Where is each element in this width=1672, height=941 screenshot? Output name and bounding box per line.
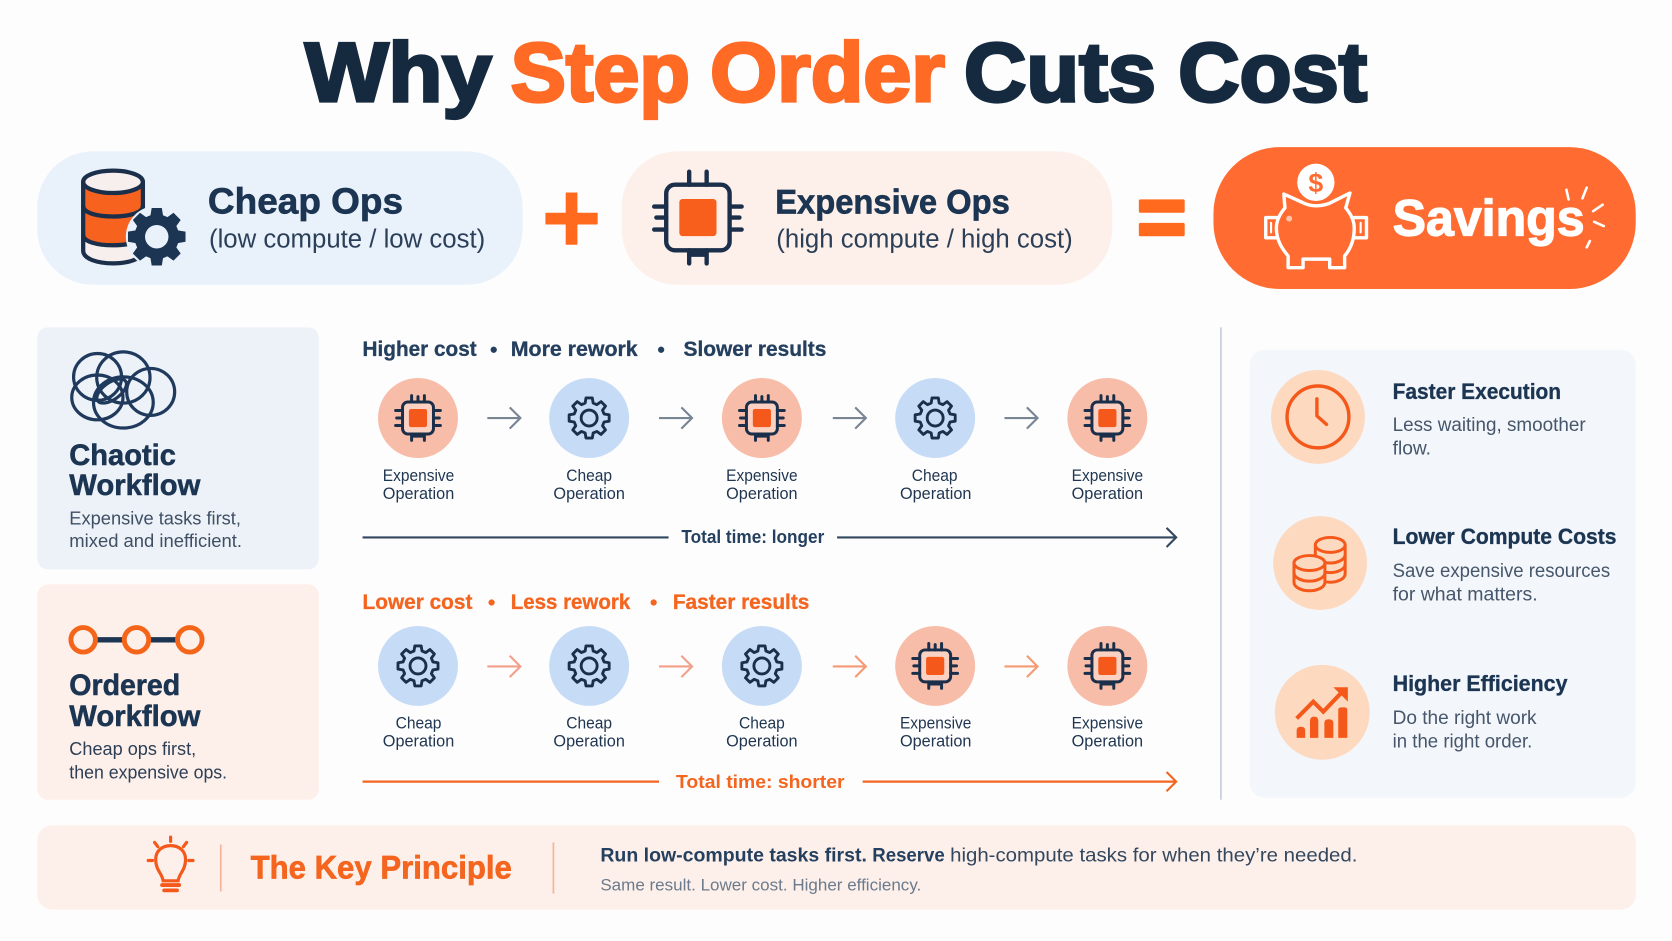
icon: large chip	[654, 172, 742, 263]
icon: coin: $	[1308, 168, 1323, 198]
ordered description: then expensive ops.	[69, 761, 227, 782]
step 4: cheap: Operation	[900, 484, 971, 503]
step 1: expensive	[378, 378, 458, 503]
chaotic heading: Workflow	[69, 469, 201, 502]
chaotic heading	[69, 439, 201, 502]
chaotic outcomes: Slower results	[684, 337, 826, 361]
cheap ops heading: Cheap Ops	[208, 180, 403, 221]
benefit: higher efficiency: in the right order.	[1393, 731, 1532, 752]
icon: rising chart	[1297, 687, 1348, 738]
step 5: expensive: Expensive	[1072, 466, 1143, 485]
ordered flow row	[363, 590, 1176, 792]
arrow	[487, 656, 520, 677]
step 1: cheap: Operation	[383, 731, 454, 750]
title: Why	[305, 26, 492, 119]
key principle statement: Run low-compute tasks first.	[600, 845, 867, 867]
chaotic description: mixed and inefficient.	[69, 530, 242, 551]
ordered outcomes: Faster results	[673, 590, 809, 614]
panel: chaotic workflow	[37, 327, 319, 569]
savings label: Savings	[1393, 190, 1585, 247]
panel: savings	[1213, 147, 1636, 289]
benefit: faster execution	[1271, 370, 1586, 464]
key principle note: Same result. Lower cost. Higher efficiency.	[600, 875, 921, 894]
icon: light bulb	[148, 837, 193, 890]
ordered outcomes: Lower cost	[363, 590, 472, 614]
ordered heading	[69, 669, 201, 733]
step 2: cheap	[549, 626, 629, 750]
step 1: cheap: Cheap	[396, 713, 441, 732]
step 5: expensive: Operation	[1072, 484, 1143, 503]
icon: ordered nodes	[71, 628, 202, 652]
step 3: expensive: Expensive	[726, 466, 798, 485]
icon: clock	[1287, 386, 1349, 448]
key principle statement: high-compute tasks for when they’re needed.	[950, 845, 1357, 867]
icon: coin	[1297, 164, 1335, 201]
title: Cost	[1178, 26, 1367, 119]
icon: piggy bank	[1266, 193, 1366, 268]
step 2: cheap: Operation	[553, 731, 625, 750]
arrow	[1004, 656, 1038, 677]
ordered heading: Workflow	[69, 700, 201, 733]
benefit: higher efficiency: Do the right work	[1393, 708, 1537, 729]
icon: plus sign	[546, 193, 597, 244]
panel: key principle	[37, 825, 1636, 910]
step 1: expensive: Operation	[383, 484, 454, 503]
step 5: expensive: Operation	[1072, 731, 1143, 750]
expensive ops heading: Expensive Ops	[775, 183, 1010, 221]
step 4: cheap: Cheap	[912, 466, 958, 485]
icon: coin stacks	[1294, 537, 1345, 591]
arrow	[659, 656, 692, 677]
panel: cheap ops	[37, 151, 522, 285]
arrow	[833, 656, 866, 677]
chaotic outcomes: More rework	[511, 337, 638, 361]
benefit: higher efficiency	[1275, 665, 1568, 760]
step 5: expensive	[1067, 378, 1147, 503]
panel: expensive ops	[622, 151, 1112, 285]
chaotic flow row	[363, 337, 1176, 547]
chaotic heading: Chaotic	[69, 439, 176, 472]
title: Step	[511, 26, 690, 119]
total time: longer: Total time: longer	[681, 527, 824, 547]
benefit: lower compute costs: Lower Compute Costs	[1393, 524, 1617, 549]
ordered heading: Ordered	[69, 669, 180, 702]
step 4: cheap	[895, 378, 975, 503]
icon: sparkles	[1566, 188, 1604, 247]
icon: database with gear	[83, 171, 188, 268]
benefit: faster execution: Less waiting, smoother	[1393, 415, 1586, 436]
arrow	[1004, 407, 1038, 429]
step 1: cheap	[378, 626, 458, 750]
ordered outcomes	[363, 590, 809, 614]
panel: ordered workflow	[37, 584, 319, 800]
step 3: cheap: Cheap	[739, 713, 785, 732]
step 3: expensive	[722, 378, 802, 503]
benefit: lower compute costs: Save expensive resources	[1393, 561, 1610, 582]
step 4: expensive	[895, 626, 975, 750]
ordered description: Cheap ops first,	[69, 738, 196, 759]
step 2: cheap	[549, 378, 629, 503]
benefit: lower compute costs	[1273, 516, 1617, 610]
step 2: cheap: Operation	[553, 484, 625, 503]
total time: shorter: Total time: shorter	[676, 771, 845, 792]
step 3: expensive: Operation	[726, 484, 798, 503]
key principle statement: Reserve	[872, 845, 945, 867]
step 2: cheap: Cheap	[566, 713, 612, 732]
icon: tangled loops	[72, 352, 175, 428]
total time: longer	[363, 527, 1176, 547]
step 5: expensive: Expensive	[1072, 713, 1143, 732]
step 3: cheap: Operation	[726, 731, 798, 750]
benefit: higher efficiency: Higher Efficiency	[1393, 671, 1568, 696]
arrow	[659, 407, 692, 429]
key principle statement	[600, 845, 1357, 867]
step 2: cheap: Cheap	[566, 466, 612, 485]
key principle heading: The Key Principle	[251, 850, 512, 886]
title	[305, 26, 1367, 119]
arrow	[487, 407, 520, 429]
step 4: expensive: Expensive	[900, 713, 971, 732]
step 5: expensive	[1067, 626, 1147, 750]
total time: shorter	[363, 771, 1176, 792]
chaotic outcomes	[363, 337, 826, 361]
step 4: expensive: Operation	[900, 731, 971, 750]
title: Cuts	[964, 26, 1156, 119]
arrow	[833, 407, 866, 429]
chaotic description: Expensive tasks first,	[69, 508, 241, 529]
icon: equals sign	[1139, 199, 1185, 236]
expensive ops description: (high compute / high cost)	[776, 225, 1073, 253]
ordered outcomes: Less rework	[511, 590, 630, 614]
step 3: cheap	[722, 626, 802, 750]
cheap ops description: (low compute / low cost)	[209, 225, 485, 253]
benefit: faster execution: flow.	[1393, 438, 1431, 459]
benefit: lower compute costs: for what matters.	[1393, 584, 1538, 605]
step 1: expensive: Expensive	[383, 466, 454, 485]
title: Order	[710, 26, 945, 119]
benefit: faster execution: Faster Execution	[1393, 379, 1561, 404]
panel: benefits	[1250, 350, 1636, 798]
chaotic description	[69, 508, 242, 551]
ordered description	[69, 738, 227, 782]
chaotic outcomes: Higher cost	[363, 337, 477, 361]
